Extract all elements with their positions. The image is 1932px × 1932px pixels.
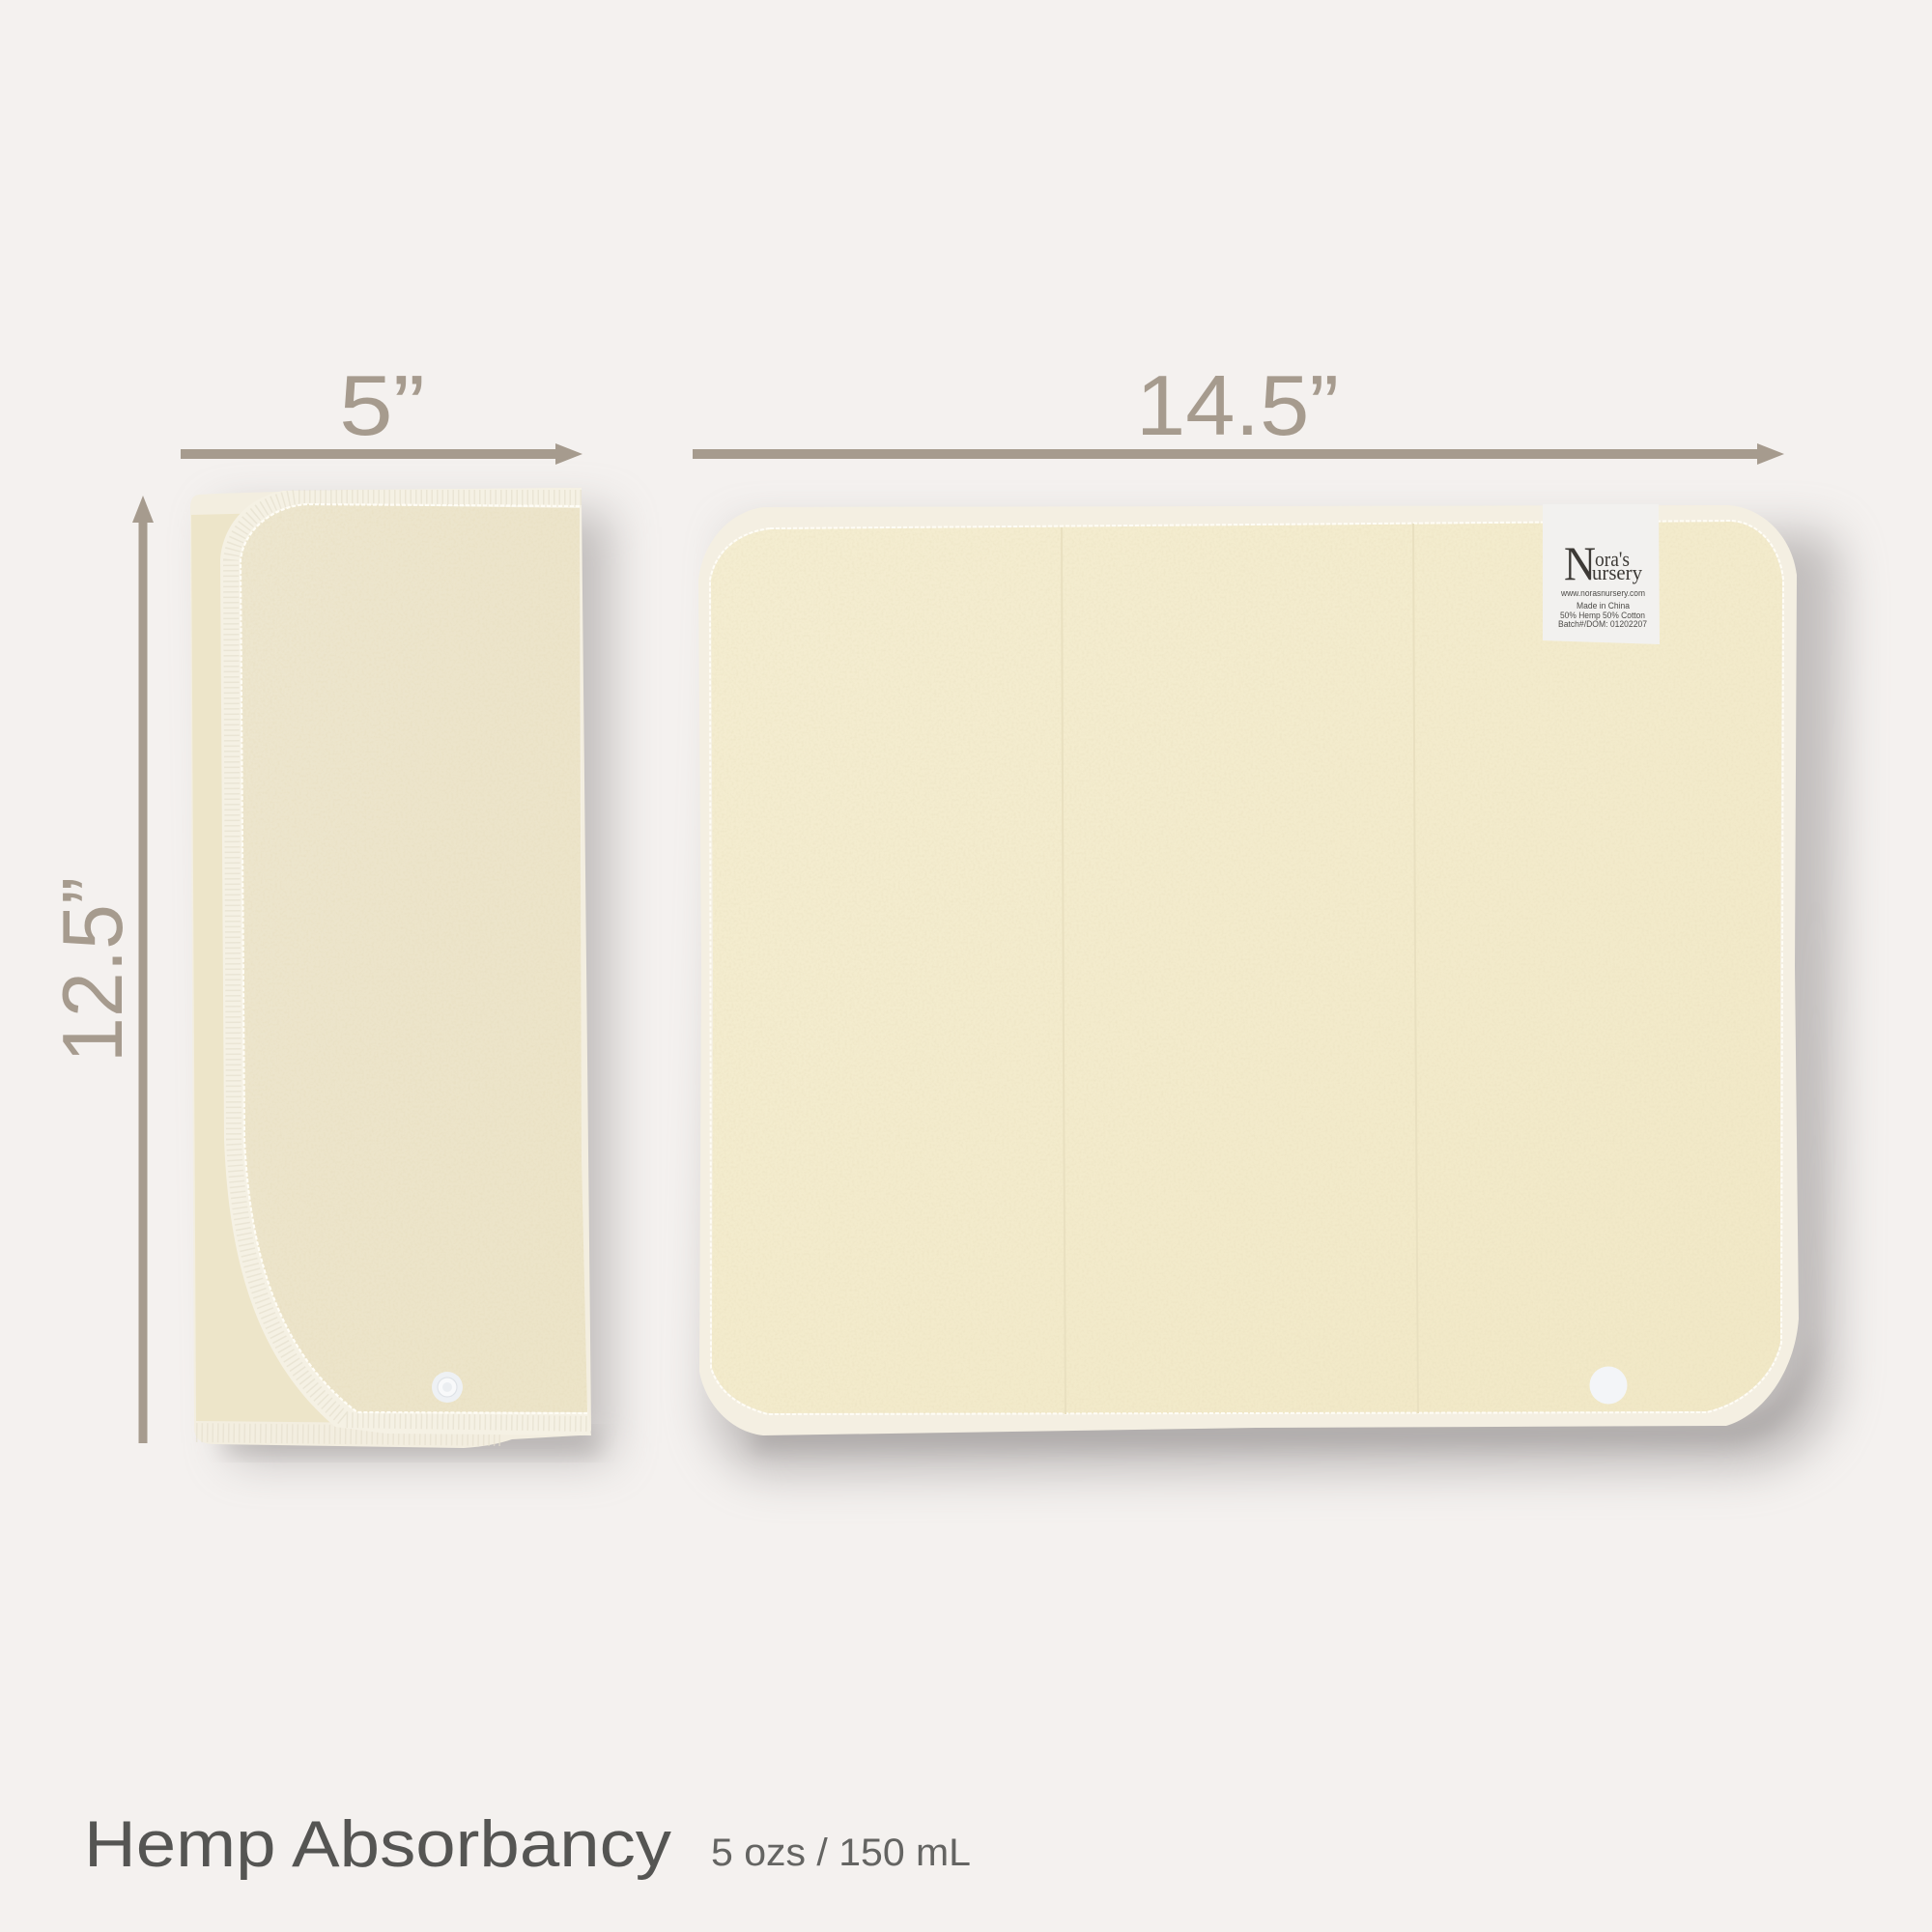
tag details: Batch#/DOM: 01202207 [1558,619,1647,629]
label: 12.5 inches: 12.5” [44,877,140,1063]
tag details: 50% Hemp 50% Cotton [1560,611,1645,620]
pad stitch line [710,521,1783,1414]
care tag [1543,504,1660,644]
front flap fabric [241,504,587,1412]
title: Hemp Absorbancy [84,1807,671,1881]
icon: large snap [1590,1366,1627,1405]
tag background [1543,504,1660,644]
folded hemp pad [190,488,611,1459]
pad fabric [711,522,1782,1413]
height arrow [132,496,154,1443]
tag logo [1564,536,1642,590]
tag details [1558,588,1647,629]
label: 5 inches: 5” [339,357,425,453]
tag details: Made in China [1577,601,1630,611]
tag logo: N [1564,536,1596,590]
unfolded hemp pad [698,504,1840,1473]
folded pad shadow [217,512,611,1459]
unfolded pad shadow [710,531,1840,1473]
flap overlock ribs [231,497,589,1424]
tag details: www.norasnursery.com [1560,588,1645,598]
folded pad back fabric [191,510,386,1423]
fabric grain [241,504,587,1412]
width arrow: unfolded [693,443,1784,465]
fabric grain [711,522,1782,1413]
back layer hem ribs [196,1433,502,1436]
front flap hem [220,488,591,1435]
left fold line [1062,527,1065,1414]
tag logo: ursery [1592,560,1642,584]
label: 14.5 inches: 14.5” [1136,357,1339,453]
absorbancy value: 5 ozs / 150 mL [711,1832,971,1874]
flap stitch line [241,504,587,1413]
icon: small snap [432,1372,463,1403]
width arrow: folded [181,443,582,465]
folded pad back layer [190,488,591,1448]
right fold line [1413,524,1418,1413]
tag logo: ora's [1595,547,1630,571]
pad hem [698,505,1799,1435]
